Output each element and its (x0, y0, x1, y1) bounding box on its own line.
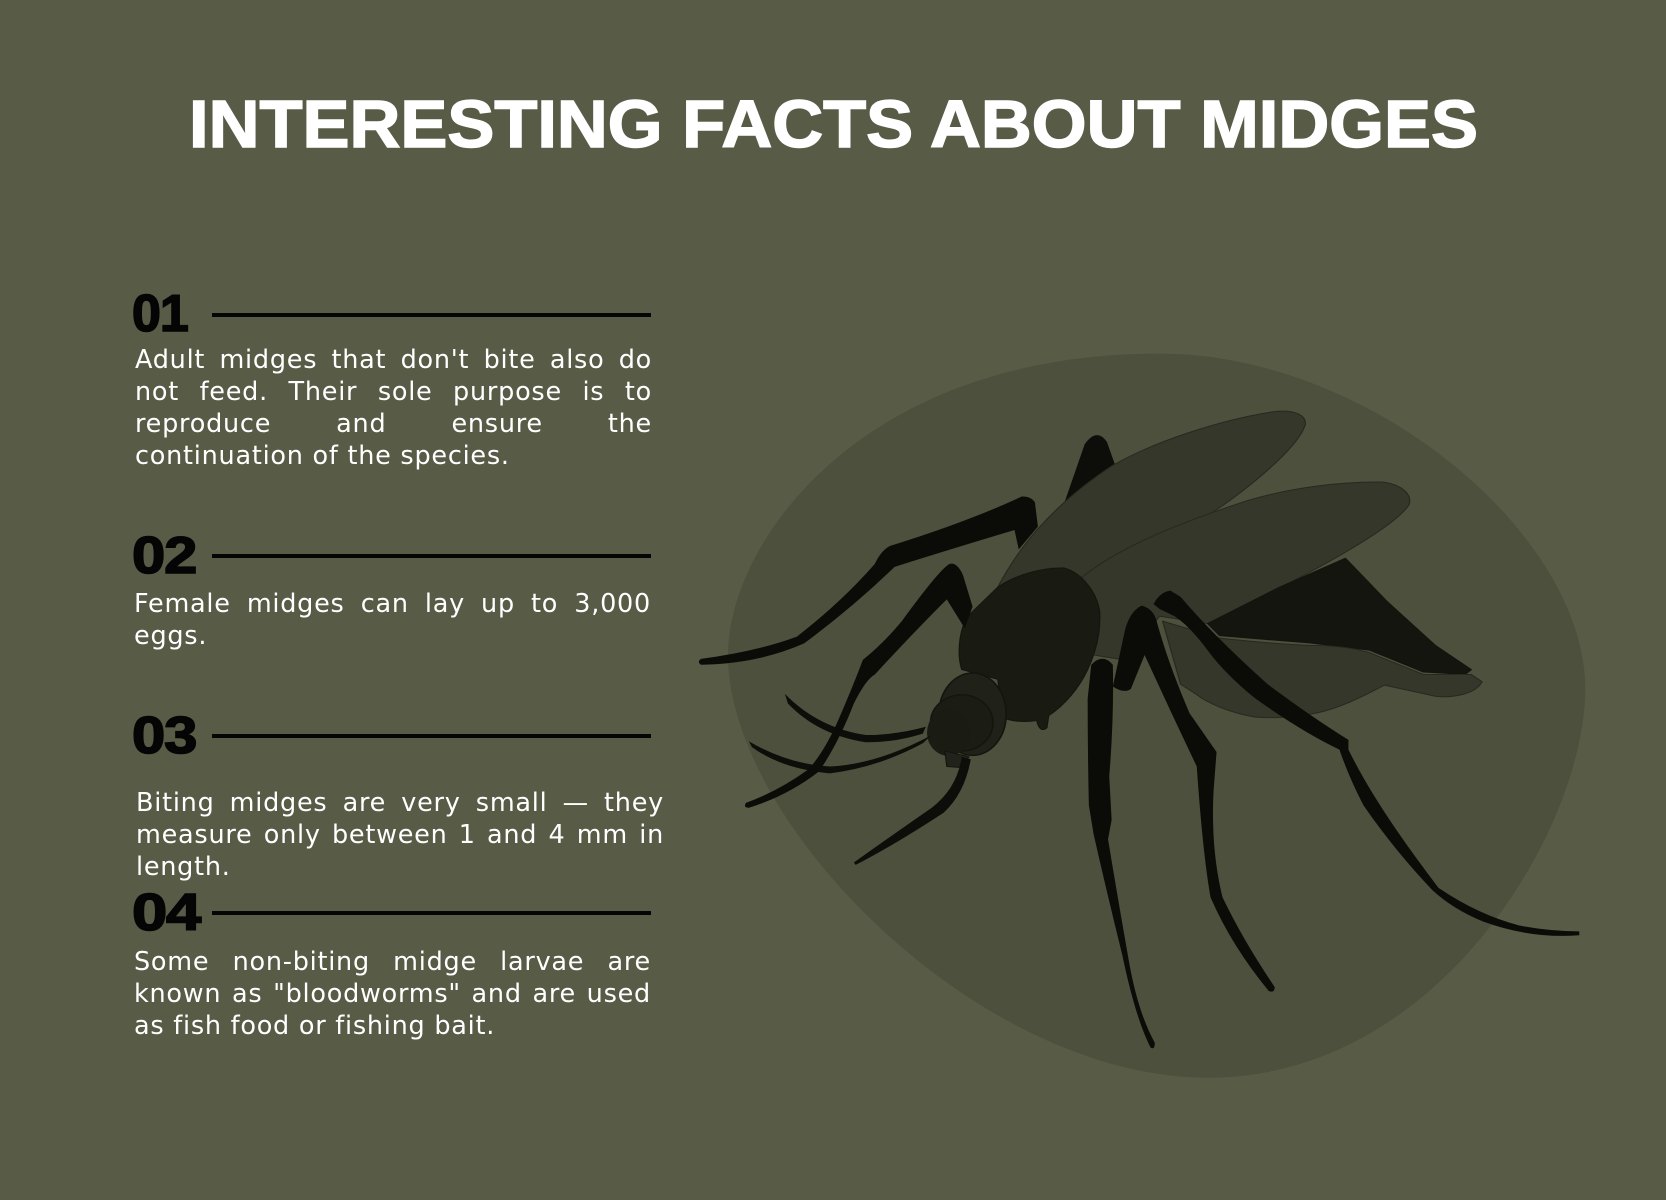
text 01: Adult midges that don't bite also do (135, 345, 652, 375)
text 01 (135, 345, 652, 471)
fact 04 (132, 884, 651, 1041)
text 02 (134, 589, 651, 651)
text 03 (136, 788, 664, 882)
fact 03 (132, 707, 664, 882)
text 01: reproduce and ensure the (135, 409, 652, 439)
text 03: Biting midges are very small — they (136, 788, 664, 818)
antennae and palps (749, 694, 971, 865)
second wing (1082, 482, 1410, 660)
text 04: Some non-biting midge larvae are (134, 947, 651, 977)
text 04: known as "bloodworms" and are used (134, 979, 651, 1009)
rule 04 (212, 911, 651, 914)
text 01: continuation of the species. (135, 441, 510, 471)
text 03: length. (136, 852, 231, 882)
title: INTERESTING FACTS ABOUT MIDGES (189, 87, 1478, 162)
number 04: 04 (132, 884, 200, 942)
midge (699, 411, 1579, 1048)
upper wing (998, 411, 1305, 587)
text 01: not feed. Their sole purpose is to (135, 377, 652, 407)
head (927, 673, 1006, 768)
background blob (728, 354, 1585, 1078)
legs (699, 497, 1579, 1048)
text 02: eggs. (134, 621, 207, 651)
number 01: 01 (132, 285, 188, 343)
text 04 (134, 947, 651, 1041)
text 04: as fish food or fishing bait. (134, 1011, 495, 1041)
text 03: measure only between 1 and 4 mm in (136, 820, 664, 850)
back leg stub (1064, 435, 1115, 505)
number 03: 03 (132, 707, 196, 765)
number 02: 02 (132, 527, 196, 585)
abdomen dark (1208, 558, 1471, 674)
lower wing (1163, 621, 1482, 718)
fact 02 (132, 527, 651, 651)
text 02: Female midges can lay up to 3,000 (134, 589, 651, 619)
rule 02 (212, 554, 651, 558)
thorax (959, 568, 1100, 730)
rule 03 (212, 734, 651, 738)
rule 01 (212, 313, 651, 316)
fact 01 (132, 285, 652, 471)
